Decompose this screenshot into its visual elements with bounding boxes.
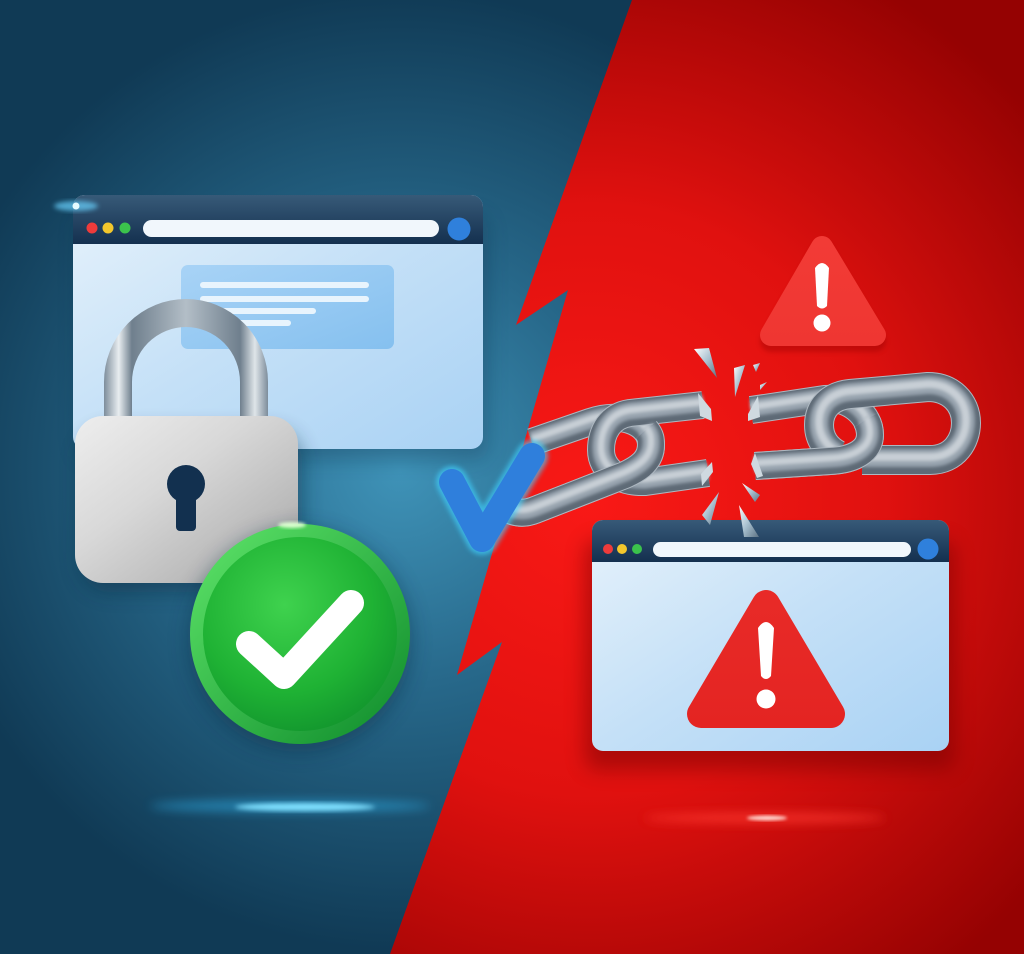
left link overlap	[506, 427, 651, 513]
profile button	[448, 218, 470, 240]
cut faces: left	[698, 393, 713, 486]
top glint	[278, 522, 306, 528]
content card	[181, 265, 394, 349]
check mark	[249, 603, 351, 676]
shackle	[118, 313, 254, 425]
window corner glint	[54, 201, 98, 211]
profile button	[918, 538, 938, 560]
right link overlap	[755, 417, 870, 466]
browser window: warning	[585, 520, 955, 770]
green check badge	[188, 522, 412, 752]
address bar	[653, 542, 911, 557]
cut faces: right	[748, 396, 763, 478]
left cut link	[601, 402, 708, 482]
broken chain: right part	[751, 384, 966, 466]
window body	[592, 520, 949, 751]
badge rim	[190, 524, 410, 744]
metal shards	[694, 348, 767, 537]
right outer link	[819, 384, 966, 460]
keyhole	[167, 465, 205, 531]
broken chain: left part	[506, 402, 708, 513]
right cut link	[751, 396, 870, 466]
window body	[73, 195, 483, 449]
badge face	[203, 537, 397, 731]
left outer link	[506, 415, 651, 513]
large warning triangle	[701, 604, 831, 714]
window header	[73, 195, 483, 244]
blue floor glow	[150, 800, 430, 812]
window control dots	[86, 222, 130, 234]
background: red lightning-edged side	[390, 0, 1024, 954]
address bar	[143, 220, 439, 237]
lock body	[75, 416, 298, 583]
window control dots	[603, 544, 642, 554]
padlock	[75, 313, 302, 592]
browser window: secure	[54, 195, 488, 460]
window header	[592, 520, 949, 562]
blue check mark with glow	[452, 456, 532, 539]
red floor glow	[645, 813, 885, 823]
small warning triangle	[771, 247, 875, 341]
